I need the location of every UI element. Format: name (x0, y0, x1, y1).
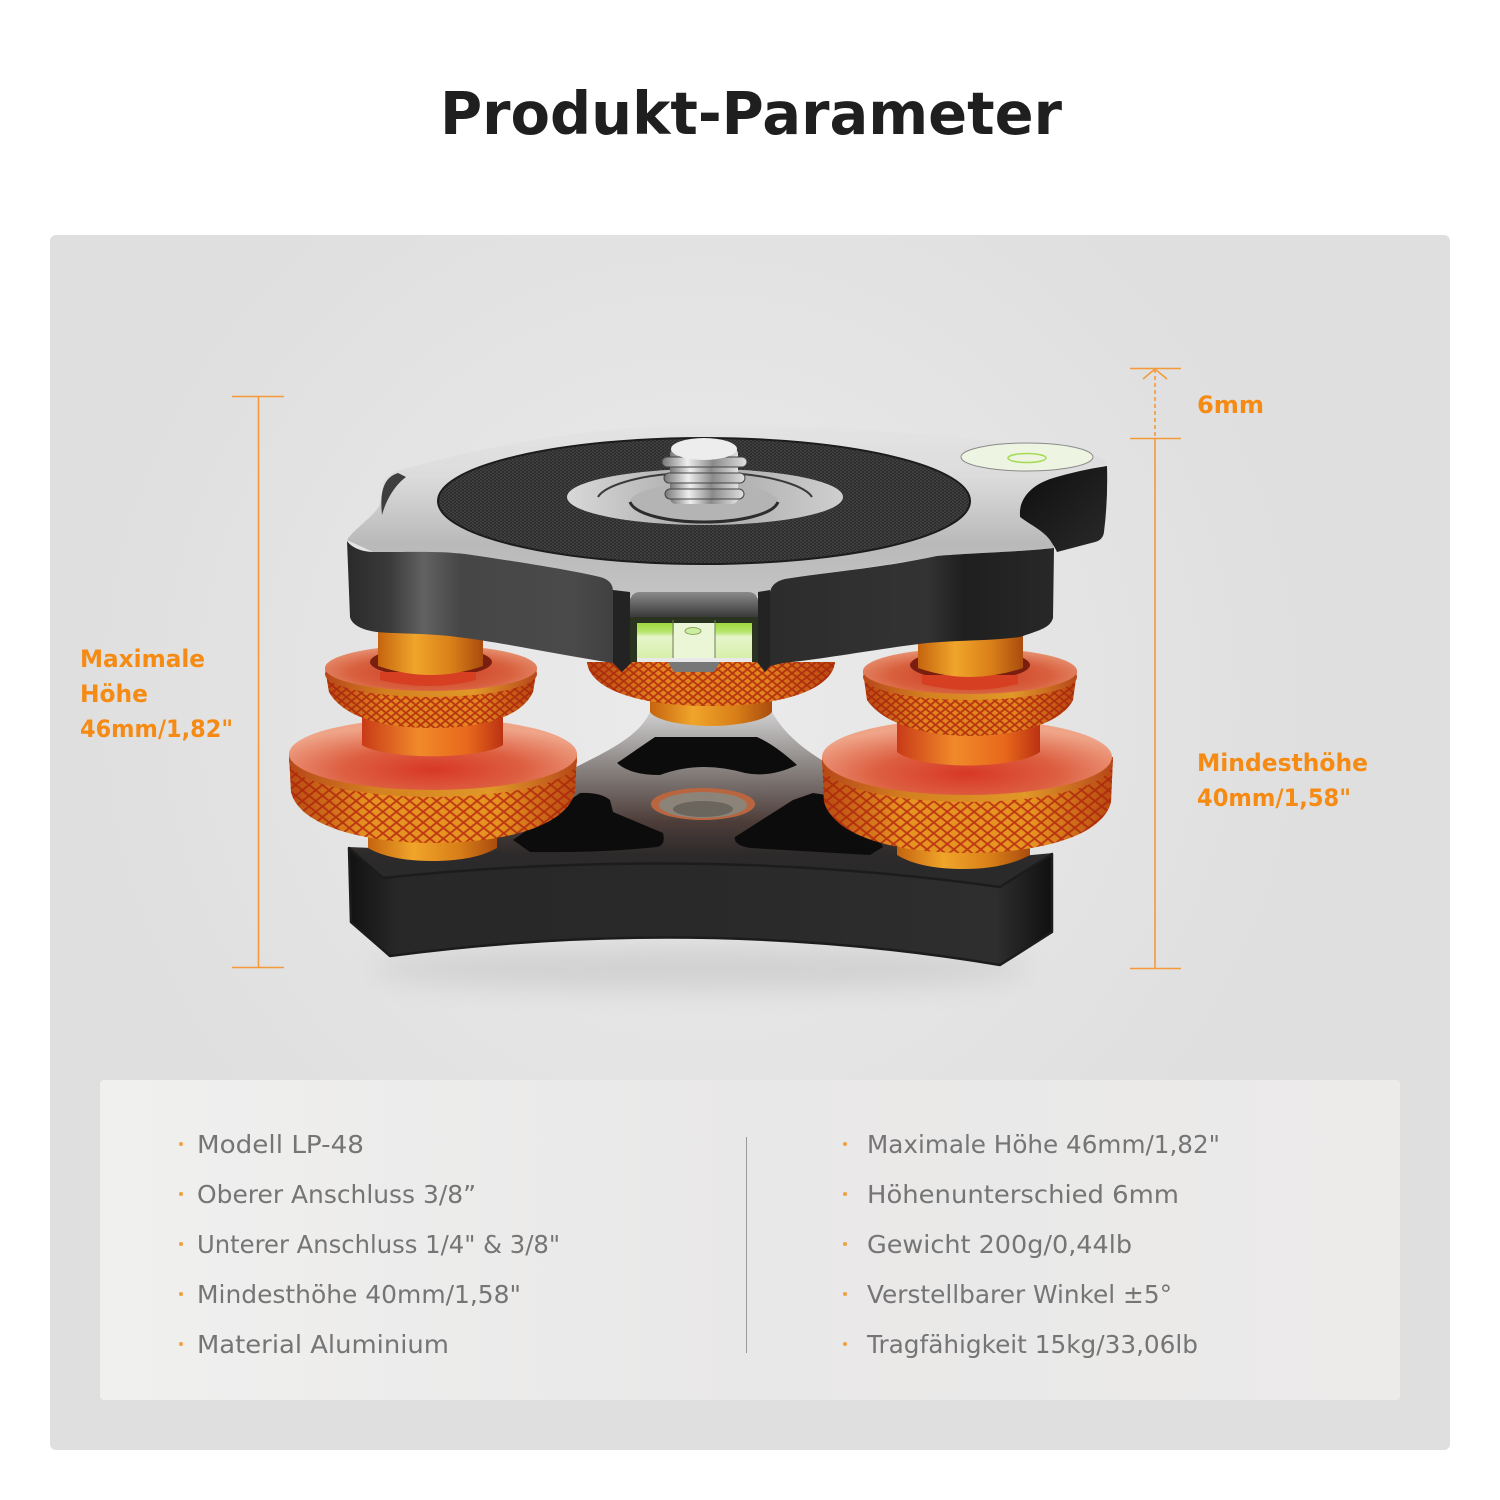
right tab inner wall (1020, 466, 1107, 552)
level housing columns (613, 590, 770, 672)
specification box (100, 1080, 1400, 1400)
dimension label: maximum height: Maximale (80, 645, 205, 673)
right spec list: Verstellbarer Winkel ±5° (867, 1280, 1172, 1309)
base block front face (349, 848, 1052, 965)
top plate (347, 424, 1107, 672)
dimension label: minimum height: 40mm/1,58" (1197, 784, 1351, 812)
slot in top plate (381, 473, 406, 515)
title: Produkt-Parameter (440, 79, 1062, 148)
left spec list: Unterer Anschluss 1/4" & 3/8" (197, 1230, 560, 1259)
front spirit level (630, 592, 758, 672)
left spec list: Modell LP-48 (197, 1130, 364, 1159)
left spec list (179, 1130, 560, 1359)
tripod screw (630, 438, 778, 522)
plate right side wall (770, 548, 1054, 666)
panel: product parameters (50, 235, 1450, 1450)
right spec list: Tragfähigkeit 15kg/33,06lb (866, 1330, 1198, 1359)
plate top surface (347, 424, 1107, 596)
column divider (746, 1137, 747, 1353)
dimension label: maximum height (80, 645, 233, 743)
right spec list: Maximale Höhe 46mm/1,82" (867, 1130, 1220, 1159)
right spec list: Höhenunterschied 6mm (867, 1180, 1179, 1209)
dimension label: maximum height: 46mm/1,82" (80, 715, 233, 743)
left spec list: Mindesthöhe 40mm/1,58" (197, 1280, 521, 1309)
left adjustment column and knobs (289, 630, 577, 861)
right spec list (843, 1130, 1220, 1359)
circular bubble level (961, 443, 1093, 471)
dimension label: maximum height: Höhe (80, 680, 148, 708)
left spec list: Material Aluminium (197, 1330, 449, 1359)
front adjustment knob (587, 662, 835, 726)
dimension label: minimum height: Mindesthöhe (1197, 749, 1368, 777)
plate left side wall (347, 541, 613, 663)
dimension: maximum height line (232, 396, 284, 968)
dimension: minimum height and 6mm travel lines (1130, 368, 1181, 968)
product: leveling base (289, 424, 1113, 965)
shadow under product (370, 946, 1030, 990)
dimension label: minimum height (1197, 749, 1368, 812)
right adjustment column and knobs (822, 630, 1113, 869)
base plate top face with cut-outs (348, 712, 1053, 887)
left spec list: Oberer Anschluss 3/8” (197, 1180, 476, 1209)
rubber pad (438, 438, 970, 564)
right spec list: Gewicht 200g/0,44lb (867, 1230, 1132, 1259)
dimension label: 6mm: 6mm (1197, 391, 1264, 419)
